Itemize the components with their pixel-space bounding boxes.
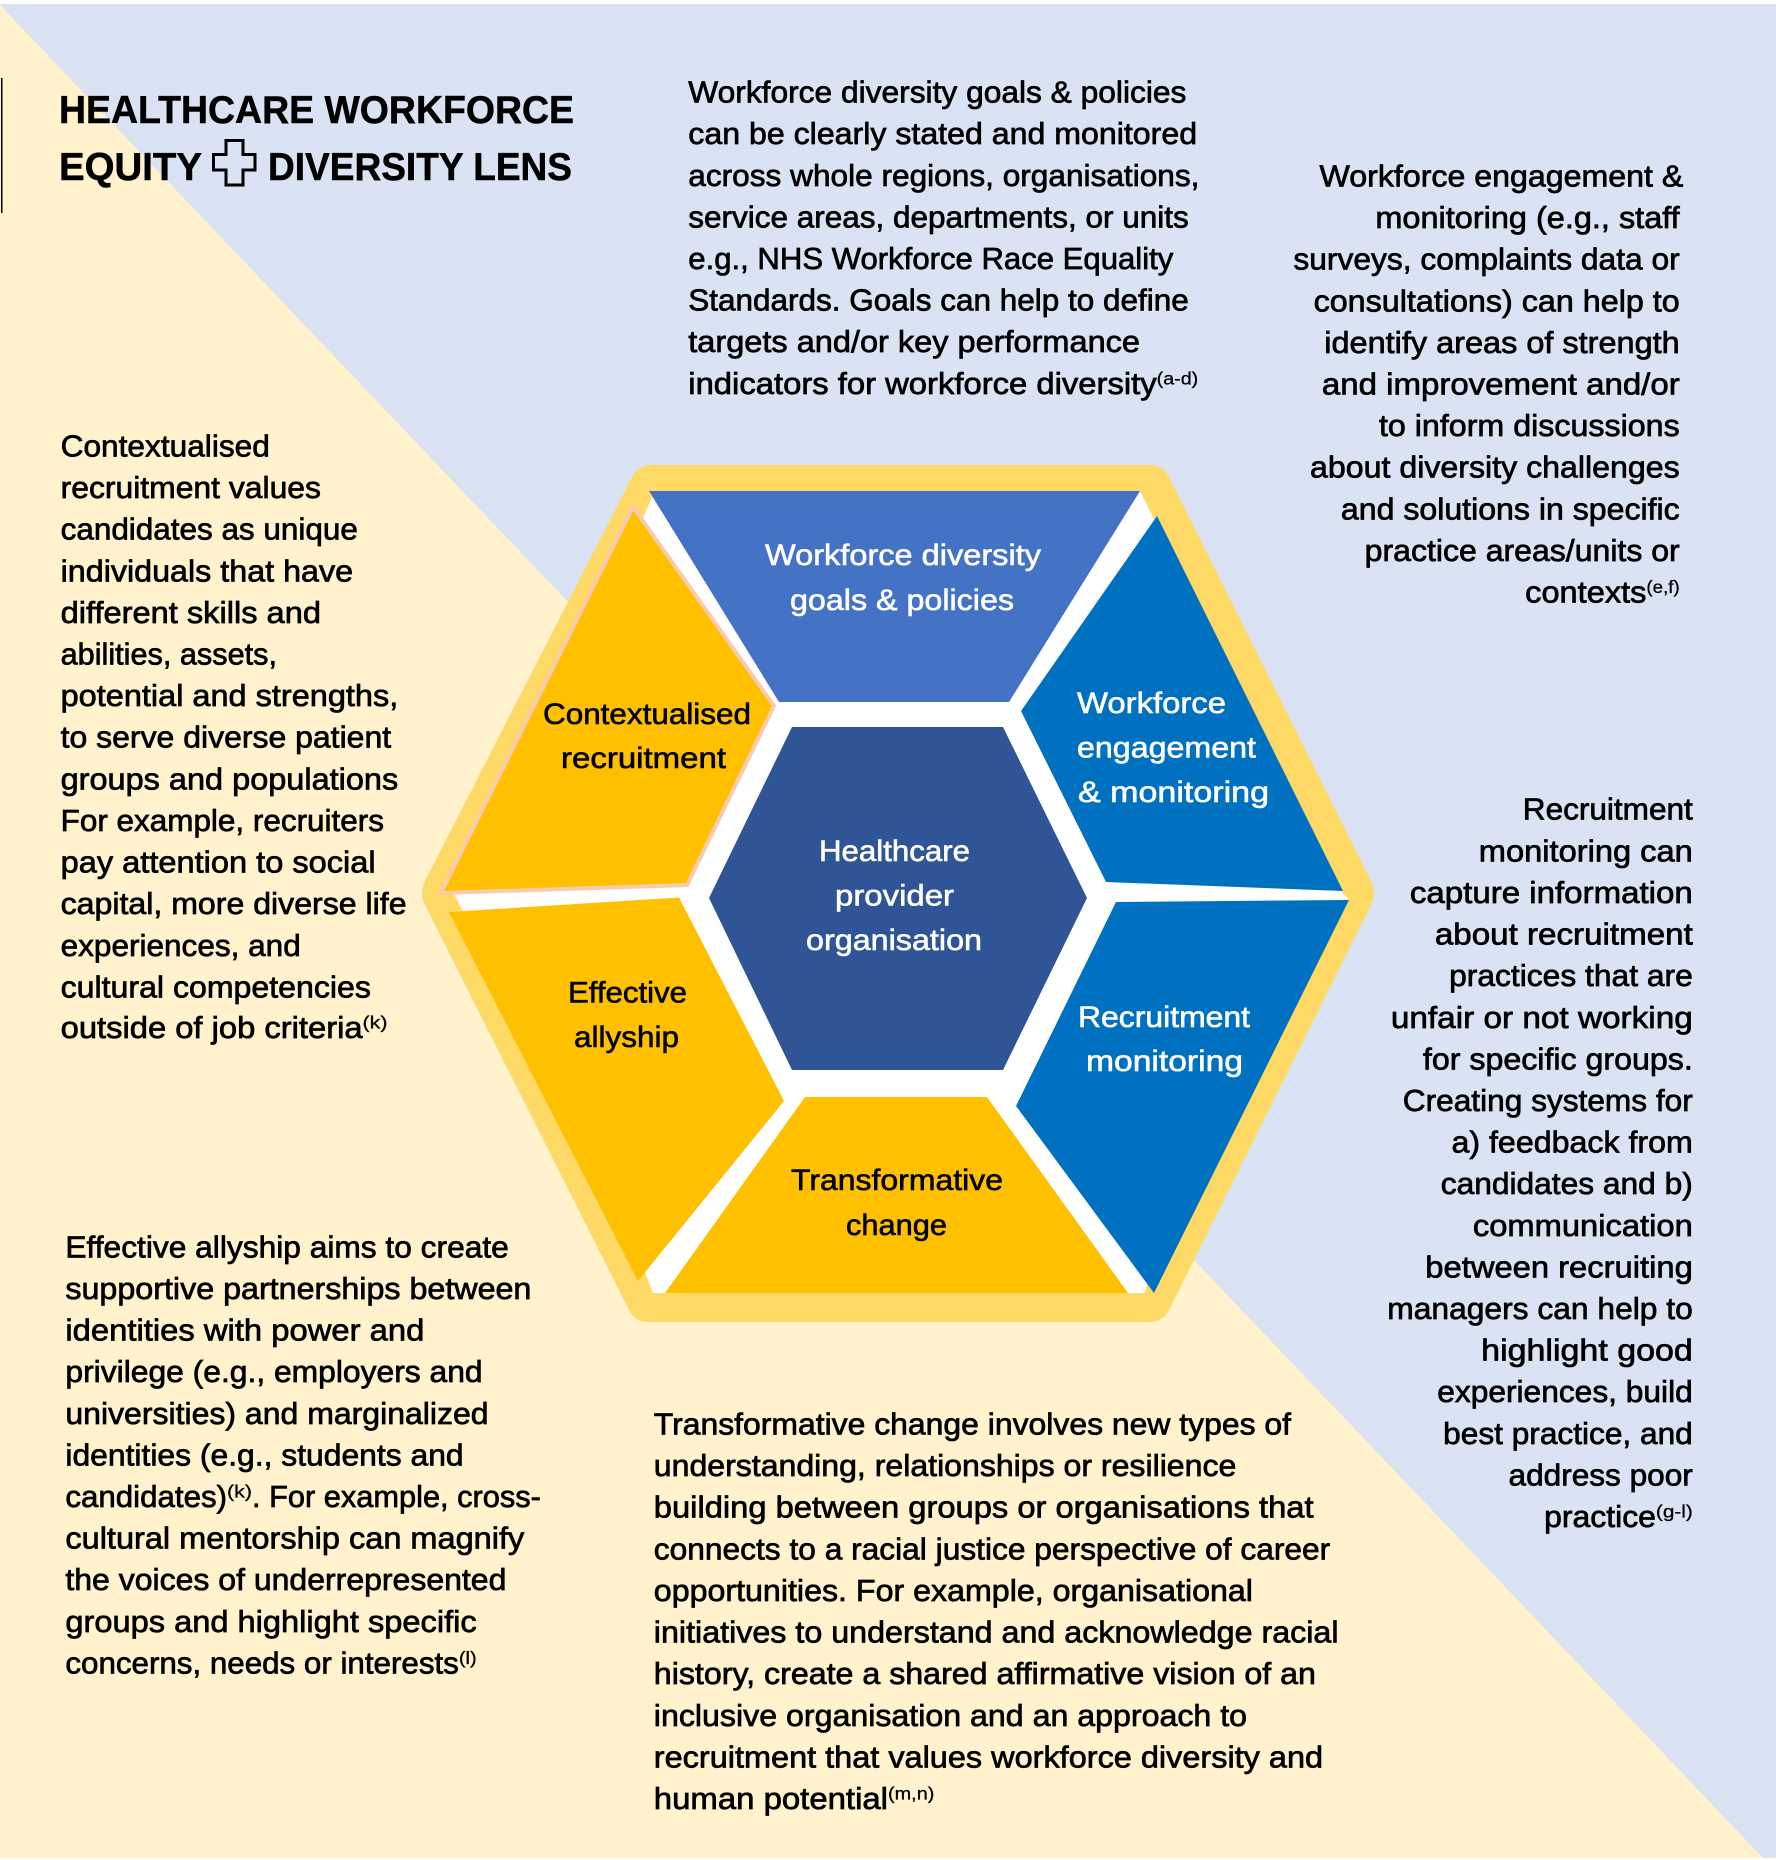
text block: workforce engagement and monitoring: to inform discussions bbox=[1379, 408, 1680, 443]
text block: contextualised recruitment: groups and populations bbox=[61, 761, 398, 796]
centre: healthcare provider organisation bbox=[709, 727, 1087, 1070]
text block: transformative change: connects to a racial justice perspective of career bbox=[654, 1531, 1330, 1566]
text block: recruitment monitoring: highlight good bbox=[1481, 1333, 1693, 1368]
text block: contextualised recruitment: potential and strengths, bbox=[61, 678, 398, 713]
segment: workforce diversity goals and policies: Workforce diversity bbox=[765, 539, 1041, 572]
segment: workforce diversity goals and policies bbox=[649, 491, 1140, 702]
text block: workforce diversity goals: can be clearly stated and monitored bbox=[688, 116, 1197, 151]
text block: contextualised recruitment: abilities, assets, bbox=[61, 637, 277, 672]
text block: effective allyship: (k) bbox=[227, 1482, 252, 1502]
text block: workforce engagement and monitoring: practice areas/units or bbox=[1365, 533, 1680, 568]
text block: workforce engagement and monitoring: monitoring (e.g., staff bbox=[1375, 200, 1680, 235]
text block: transformative change: human potential bbox=[654, 1781, 888, 1816]
centre: healthcare provider organisation: organisation bbox=[806, 924, 982, 957]
text block: recruitment monitoring: for specific groups. bbox=[1423, 1041, 1693, 1076]
text block: recruitment monitoring: between recruiting bbox=[1425, 1249, 1693, 1284]
text block: effective allyship bbox=[65, 1229, 541, 1680]
text block: effective allyship: candidates) bbox=[65, 1479, 227, 1514]
title: EQUITY bbox=[59, 146, 202, 189]
segment: workforce engagement and monitoring bbox=[1021, 516, 1343, 891]
title: HEALTHCARE WORKFORCE bbox=[59, 89, 574, 132]
segment: workforce engagement and monitoring: & monitoring bbox=[1078, 776, 1269, 809]
text block: workforce diversity goals: e.g., NHS Workforce Race Equality bbox=[688, 241, 1174, 276]
text block: recruitment monitoring: capture information bbox=[1410, 875, 1693, 910]
text block: transformative change: (m,n) bbox=[888, 1783, 934, 1803]
text block: contextualised recruitment: candidates as unique bbox=[61, 512, 358, 547]
segment: contextualised recruitment: recruitment bbox=[561, 742, 727, 775]
segment: recruitment monitoring bbox=[1016, 900, 1349, 1293]
hexagon outer ring bbox=[422, 465, 1374, 1322]
text block: workforce engagement and monitoring: identify areas of strength bbox=[1324, 325, 1680, 360]
text block: transformative change bbox=[654, 1407, 1339, 1816]
text block: recruitment monitoring: address poor bbox=[1509, 1457, 1693, 1492]
text block: transformative change: recruitment that values workforce diversity and bbox=[654, 1739, 1323, 1774]
segment: contextualised recruitment: Contextualised bbox=[543, 698, 751, 731]
segment: effective allyship: allyship bbox=[574, 1021, 679, 1054]
title bbox=[59, 89, 574, 189]
centre: healthcare provider organisation: provider bbox=[835, 880, 954, 912]
text block: contextualised recruitment: For example, recruiters bbox=[61, 803, 384, 838]
text block: effective allyship: supportive partnerships between bbox=[65, 1271, 531, 1306]
text block: effective allyship: universities) and marginalized bbox=[65, 1396, 489, 1431]
text block: effective allyship: privilege (e.g., employers and bbox=[65, 1354, 483, 1389]
text block: workforce diversity goals: targets and/or key performance bbox=[688, 324, 1140, 359]
text block: effective allyship: identities with power and bbox=[65, 1313, 424, 1348]
text block: recruitment monitoring: managers can help to bbox=[1387, 1291, 1693, 1326]
text block: contextualised recruitment: pay attention to social bbox=[61, 845, 376, 880]
segment: transformative change: change bbox=[846, 1209, 947, 1242]
text block: recruitment monitoring: unfair or not working bbox=[1391, 1000, 1693, 1035]
text block: contextualised recruitment bbox=[61, 428, 407, 1045]
text block: effective allyship: the voices of underrepresented bbox=[65, 1562, 506, 1597]
text block: workforce engagement and monitoring: Workforce engagement & bbox=[1320, 158, 1684, 193]
text block: contextualised recruitment: outside of job criteria bbox=[61, 1010, 363, 1045]
text block: contextualised recruitment: individuals that have bbox=[61, 553, 353, 588]
text block: workforce engagement and monitoring: and solutions in specific bbox=[1341, 491, 1680, 526]
text block: recruitment monitoring: (g-l) bbox=[1656, 1502, 1693, 1522]
text block: recruitment monitoring: candidates and b) bbox=[1441, 1166, 1693, 1201]
text block: effective allyship: concerns, needs or interests bbox=[65, 1645, 459, 1680]
text block: workforce engagement and monitoring: consultations) can help to bbox=[1314, 283, 1680, 318]
text block: recruitment monitoring: Recruitment bbox=[1523, 792, 1693, 827]
text block: recruitment monitoring: monitoring can bbox=[1479, 833, 1693, 868]
segment: transformative change: Transformative bbox=[791, 1164, 1003, 1197]
text block: effective allyship: identities (e.g., students and bbox=[65, 1437, 464, 1472]
text block: recruitment monitoring: communication bbox=[1473, 1208, 1693, 1243]
text block: workforce engagement and monitoring: about diversity challenges bbox=[1310, 450, 1680, 485]
text block: effective allyship: cultural mentorship can magnify bbox=[65, 1521, 525, 1556]
text block: transformative change: history, create a shared affirmative vision of an bbox=[654, 1656, 1316, 1691]
thin left edge line bbox=[1, 78, 2, 213]
segment: workforce engagement and monitoring: engagement bbox=[1077, 732, 1257, 764]
text block: recruitment monitoring: a) feedback from bbox=[1451, 1125, 1693, 1160]
text block: workforce diversity goals: Workforce diversity goals & policies bbox=[688, 75, 1186, 110]
text block: workforce diversity goals: (a-d) bbox=[1157, 368, 1198, 388]
text block: transformative change: inclusive organisation and an approach to bbox=[654, 1698, 1247, 1733]
text block: workforce engagement and monitoring: (e,f) bbox=[1646, 577, 1680, 597]
text block: contextualised recruitment: Contextualised bbox=[61, 428, 270, 463]
segment: transformative change bbox=[665, 1097, 1128, 1293]
segment: effective allyship: Effective bbox=[568, 976, 687, 1010]
text block: contextualised recruitment: cultural competencies bbox=[61, 969, 371, 1004]
text block: transformative change: building between groups or organisations that bbox=[654, 1490, 1314, 1525]
text block: contextualised recruitment: (k) bbox=[363, 1012, 388, 1032]
text block: transformative change: Transformative change involves new types of bbox=[654, 1407, 1291, 1442]
title: DIVERSITY LENS bbox=[268, 146, 572, 189]
text block: recruitment monitoring: Creating systems for bbox=[1403, 1083, 1693, 1118]
hexagon inner white field bbox=[455, 491, 1349, 1293]
text block: recruitment monitoring: experiences, build bbox=[1437, 1374, 1693, 1409]
text block: contextualised recruitment: recruitment values bbox=[61, 470, 321, 505]
text block: recruitment monitoring bbox=[1387, 792, 1693, 1534]
hexagon diagram bbox=[422, 465, 1374, 1322]
text block: contextualised recruitment: capital, more diverse life bbox=[61, 886, 407, 921]
segment: recruitment monitoring: monitoring bbox=[1086, 1045, 1243, 1078]
segment: recruitment monitoring: Recruitment bbox=[1078, 1001, 1251, 1034]
text block: effective allyship: groups and highlight specific bbox=[65, 1604, 477, 1639]
text block: workforce engagement and monitoring: and improvement and/or bbox=[1322, 366, 1680, 401]
text block: effective allyship: (l) bbox=[459, 1648, 477, 1668]
text block: workforce diversity goals: Standards. Goals can help to define bbox=[688, 283, 1189, 318]
text block: workforce diversity goals bbox=[688, 75, 1199, 401]
text block: workforce diversity goals: across whole regions, organisations, bbox=[688, 158, 1199, 193]
text block: recruitment monitoring: practice bbox=[1544, 1499, 1656, 1534]
centre: healthcare provider organisation: Healthcare bbox=[819, 835, 970, 868]
text block: workforce diversity goals: service areas, departments, or units bbox=[688, 199, 1189, 234]
text block: workforce diversity goals: indicators for workforce diversity bbox=[688, 366, 1157, 401]
text block: contextualised recruitment: to serve diverse patient bbox=[61, 720, 392, 755]
text block: transformative change: opportunities. For example, organisational bbox=[654, 1573, 1253, 1608]
text block: recruitment monitoring: about recruitment bbox=[1435, 917, 1693, 952]
segment: workforce engagement and monitoring: Workforce bbox=[1077, 687, 1226, 720]
icon: outline plus bbox=[214, 140, 255, 185]
text block: recruitment monitoring: practices that are bbox=[1449, 958, 1693, 993]
text block: transformative change: initiatives to understand and acknowledge racial bbox=[654, 1615, 1339, 1650]
text block: workforce engagement and monitoring bbox=[1293, 158, 1684, 610]
text block: effective allyship: Effective allyship aims to create bbox=[65, 1229, 509, 1264]
text block: effective allyship: . For example, cross- bbox=[252, 1479, 541, 1514]
text block: recruitment monitoring: best practice, and bbox=[1443, 1416, 1693, 1451]
segment: workforce diversity goals and policies: goals & policies bbox=[790, 584, 1014, 617]
text block: contextualised recruitment: experiences, and bbox=[61, 928, 301, 963]
segment: contextualised recruitment bbox=[441, 507, 774, 893]
text block: workforce engagement and monitoring: contexts bbox=[1525, 575, 1646, 610]
text block: workforce engagement and monitoring: surveys, complaints data or bbox=[1293, 242, 1680, 277]
text block: transformative change: understanding, relationships or resilience bbox=[654, 1448, 1236, 1483]
segment: effective allyship bbox=[449, 898, 784, 1281]
text block: contextualised recruitment: different skills and bbox=[61, 595, 321, 630]
